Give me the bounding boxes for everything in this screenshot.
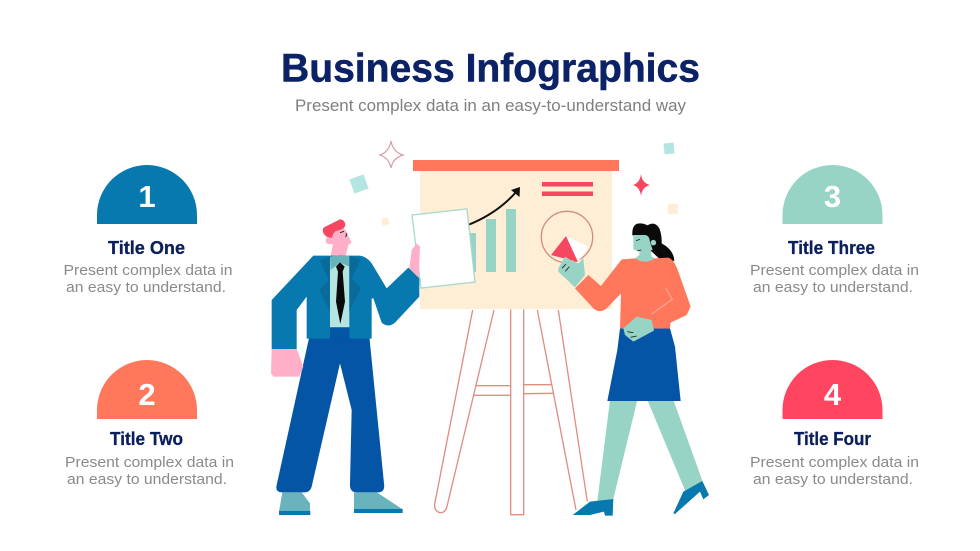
panel: item three xyxy=(750,165,919,296)
text: description one: an easy to understand. xyxy=(66,279,226,296)
easel legs xyxy=(435,309,587,515)
badge 3: 3 xyxy=(824,179,841,214)
woman figure xyxy=(558,223,709,516)
trend arrow xyxy=(468,187,520,225)
heading: title three: Title Three xyxy=(788,238,875,258)
text: description four: Present complex data in xyxy=(750,454,919,471)
ear xyxy=(326,237,333,244)
collar xyxy=(330,255,349,270)
text: description three: an easy to understand. xyxy=(753,279,913,296)
panel: item two xyxy=(65,360,234,488)
text: description four xyxy=(750,454,919,488)
heading: title two: Title Two xyxy=(110,429,183,449)
presentation board xyxy=(413,160,619,309)
text: description three: Present complex data in xyxy=(750,262,919,279)
text: description two xyxy=(65,454,234,488)
lower hand xyxy=(623,317,654,342)
sweater xyxy=(575,258,691,328)
badge 4: 4 xyxy=(824,377,842,412)
text: description three xyxy=(750,262,919,296)
badge 1 xyxy=(97,165,197,224)
held paper xyxy=(412,209,475,288)
icon: small cream square xyxy=(381,217,390,226)
red lines xyxy=(542,182,593,196)
board surface xyxy=(420,171,612,309)
tie xyxy=(336,262,345,324)
lower hand xyxy=(271,349,303,377)
badge 4 xyxy=(782,360,882,419)
face xyxy=(327,228,352,247)
raised hand xyxy=(409,243,420,280)
eye and mouth details xyxy=(340,231,347,237)
sleeve line xyxy=(652,288,672,314)
text: description four: an easy to understand. xyxy=(753,471,913,488)
heading: title one: Title One xyxy=(108,238,185,258)
pie chart xyxy=(541,211,593,263)
bar chart xyxy=(468,209,516,272)
text: description two: an easy to understand. xyxy=(67,471,227,488)
icon: cream square xyxy=(668,204,678,214)
hair back xyxy=(632,223,674,261)
text: description one xyxy=(64,262,232,296)
man figure xyxy=(271,219,420,515)
shoes xyxy=(573,481,709,516)
face xyxy=(633,235,653,252)
subtitle: Present complex data in an easy-to-understand way xyxy=(295,97,687,115)
ear xyxy=(650,240,656,246)
neck xyxy=(635,250,656,263)
title: Business Infographics xyxy=(281,46,700,90)
face and finger details xyxy=(562,239,641,337)
shirt xyxy=(330,257,349,327)
panel: item four xyxy=(750,360,919,488)
pants xyxy=(276,337,384,492)
upper hand xyxy=(558,257,585,287)
hair xyxy=(323,219,345,238)
lapels xyxy=(319,256,361,312)
icon: teal square xyxy=(349,174,369,194)
skirt xyxy=(607,328,681,401)
badge 2: 2 xyxy=(138,377,156,412)
panel: item one xyxy=(64,165,232,296)
badge 1: 1 xyxy=(138,179,156,214)
board top bar xyxy=(413,160,619,171)
badge 2 xyxy=(97,360,197,419)
text: description one: Present complex data in xyxy=(64,262,232,279)
shoes xyxy=(279,492,403,515)
heading: title four: Title Four xyxy=(794,429,871,449)
icon: outline sparkle xyxy=(380,141,403,168)
neck xyxy=(330,238,348,257)
waistband xyxy=(330,327,349,339)
text: description two: Present complex data in xyxy=(65,454,234,471)
icon: red sparkle xyxy=(633,174,650,196)
icon: light teal square xyxy=(664,143,675,154)
jacket xyxy=(272,256,419,349)
legs xyxy=(597,400,702,501)
badge 3 xyxy=(782,165,882,224)
